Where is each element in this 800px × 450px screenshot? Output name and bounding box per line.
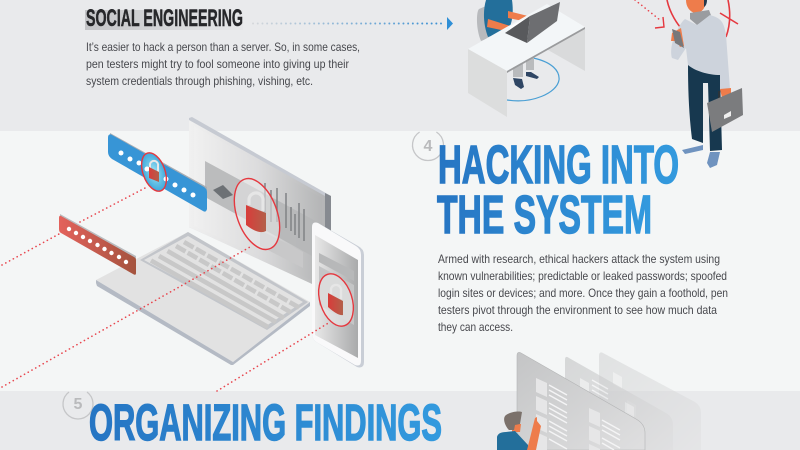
hacking text: they can access. [438, 320, 513, 334]
step number 4: 4 [424, 138, 433, 155]
lock on laptop screen [226, 172, 288, 256]
hacking text: login sites or devices; and more. Once they gain a foothold, pen [438, 286, 728, 300]
illustration: laptop [96, 117, 331, 365]
hacking text: testers pivot through the environment to see how much data [438, 303, 717, 317]
illustration: target person with phone and briefcase [667, 0, 743, 168]
top section background [0, 0, 800, 131]
dotted arrow to desk [253, 17, 453, 30]
illustration: person at desk [468, 0, 585, 117]
red dotted attack lines [2, 187, 330, 391]
social engineering text: pen testers might try to fool someone into giving up their [86, 57, 349, 71]
step number 4 [412, 132, 443, 161]
step number 5: 5 [74, 396, 83, 413]
illustration: stacked report panels [517, 352, 701, 450]
hacking text: Armed with research, ethical hackers attack the system using [438, 252, 720, 266]
social engineering text: It’s easier to hack a person than a server. So, in some cases, [86, 40, 360, 54]
hacking text [438, 252, 728, 334]
middle section background [0, 131, 800, 391]
illustration: person pointing at panels [497, 411, 541, 450]
heading: hacking into the system: THE SYSTEM [437, 185, 652, 245]
heading: hacking into the system [437, 135, 679, 245]
red dotted arrow to target [635, 0, 664, 28]
subheading: social engineering [85, 5, 243, 32]
heading: organizing findings: ORGANIZING FINDINGS [89, 394, 442, 450]
step number 5 [63, 392, 93, 419]
subheading: social engineering: SOCIAL ENGINEERING [86, 5, 243, 32]
illustration: phone [312, 222, 364, 367]
illustration: red password bar [59, 214, 136, 275]
social engineering text: system credentials through phishing, vishing, etc. [86, 74, 313, 88]
bottom section background [0, 391, 800, 450]
illustration: blue password bar [108, 133, 207, 212]
social engineering text [86, 40, 360, 88]
hacking text: known vulnerabilities; predictable or leaked passwords; spoofed [438, 269, 727, 283]
lock on blue bar [137, 149, 171, 195]
